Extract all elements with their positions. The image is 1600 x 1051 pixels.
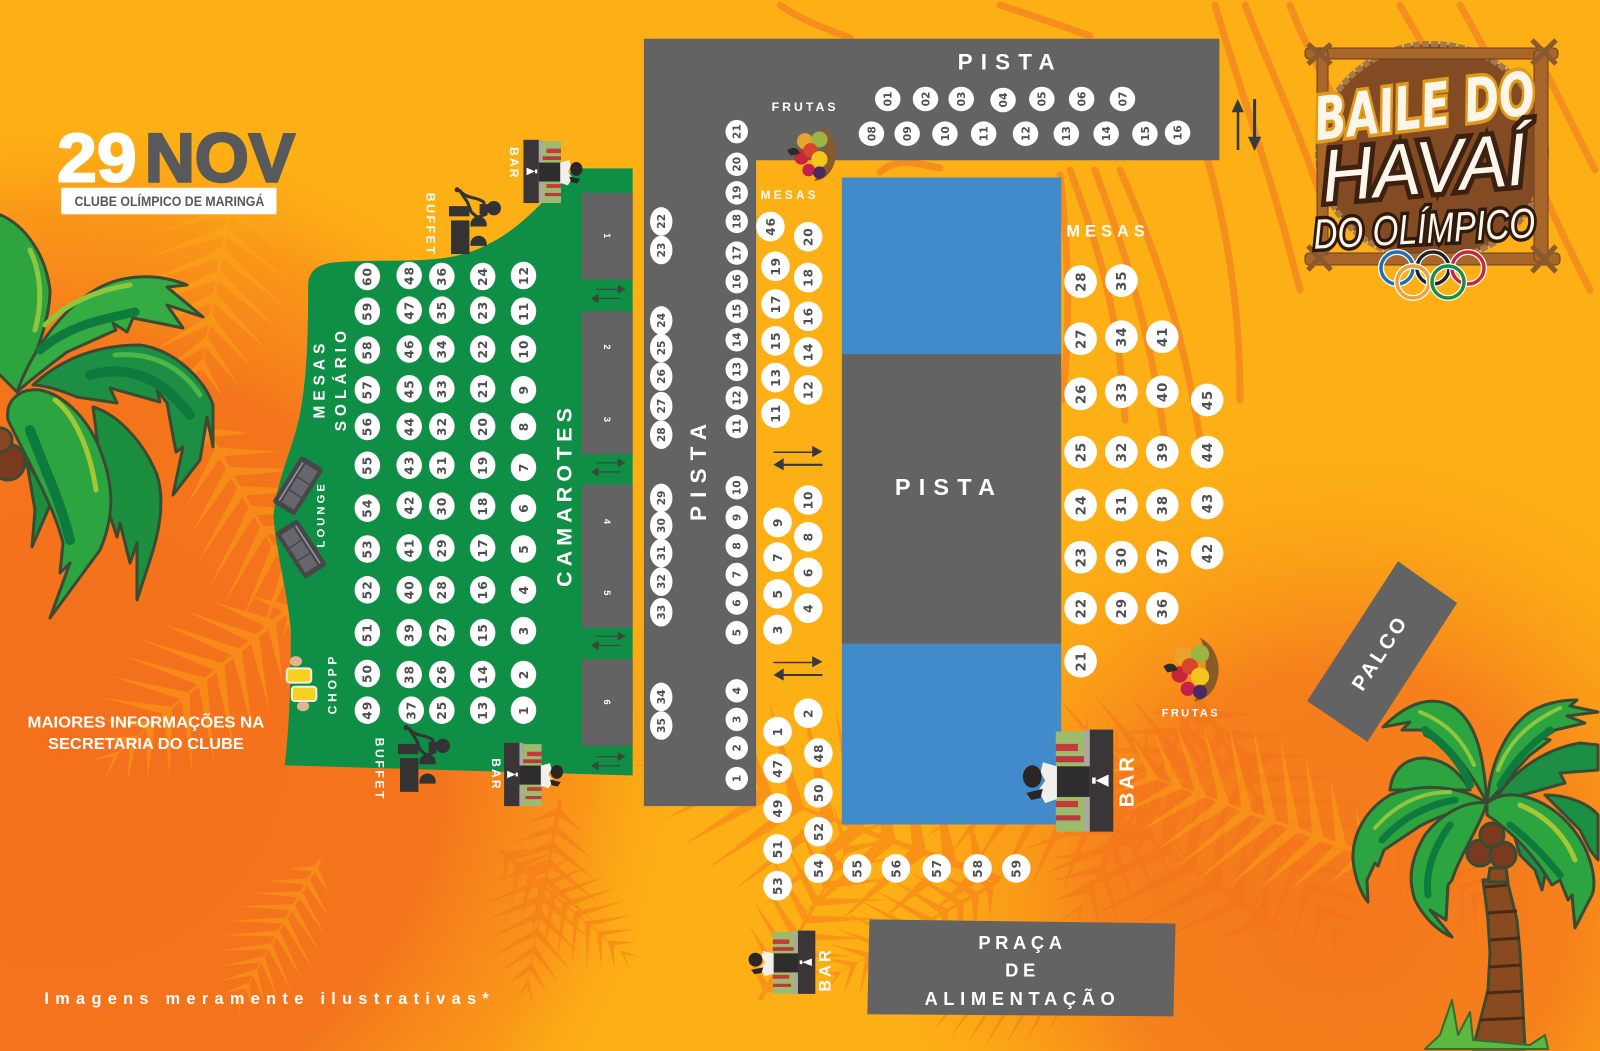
seats: mesas right block: 33 <box>1115 382 1130 402</box>
logo: Baile do Havaí do Olímpico <box>1305 40 1560 298</box>
disclaimer: Imagens meramente ilustrativas* <box>44 990 492 1008</box>
seats: mesas right block: 42 <box>1201 543 1216 563</box>
seats: mesas solário: 58 <box>361 340 375 360</box>
seats: pista vertical outer column: 22 <box>655 214 668 229</box>
seats: mesas left strip: 20 <box>802 227 816 246</box>
info text <box>28 714 264 753</box>
seats: mesas left strip: 11 <box>769 404 783 423</box>
seats: mesas left strip: 58 <box>971 859 985 878</box>
seats: mesas left strip: 55 <box>851 859 865 878</box>
seats: pista vertical inner column: 5 <box>731 629 744 636</box>
seats: mesas solário: 47 <box>403 301 417 320</box>
seats: mesas left strip: 15 <box>769 331 783 350</box>
seats: pista vertical outer column: 28 <box>655 427 668 442</box>
icon: bar right <box>1023 730 1113 832</box>
seats: mesas solário: 39 <box>403 623 417 642</box>
panel: camarotes <box>582 193 633 746</box>
seats: pista vertical inner column: 21 <box>731 124 744 139</box>
panel: praça de alimentação: PRAÇA <box>978 932 1067 953</box>
icon: bar top <box>523 140 582 203</box>
seats: pista vertical outer column: 26 <box>655 369 668 384</box>
seats: mesas left strip: 17 <box>769 295 783 313</box>
date heading: 29 NOV <box>57 121 295 197</box>
arrow: two-way lower lane <box>773 656 822 681</box>
seats: mesas solário: 19 <box>476 456 490 475</box>
seats: mesas solário: 14 <box>476 665 490 684</box>
seats: mesas right block: 41 <box>1156 326 1171 347</box>
venue label <box>61 188 277 214</box>
seats: pista top row: 01 <box>882 92 895 106</box>
seats: pista vertical inner column: 10 <box>731 480 744 495</box>
seats: pista top row: 04 <box>997 93 1010 107</box>
seats: pista top row: 14 <box>1100 126 1113 141</box>
seats: mesas left strip: 6 <box>802 568 816 577</box>
seats: mesas right block: 21 <box>1074 651 1089 671</box>
label: bar bottom: BAR <box>817 947 835 992</box>
seats: pista vertical outer column: 25 <box>655 341 668 355</box>
seats: mesas solário: 1 <box>517 705 531 715</box>
icon: fruit basket top <box>787 125 836 181</box>
panel: palco: PALCO <box>1348 611 1413 695</box>
seats: pista vertical outer column: 34 <box>655 689 668 704</box>
seats: mesas solário: 28 <box>435 580 449 599</box>
seats: mesas left strip: 1 <box>771 727 785 736</box>
seats: pista top row: 15 <box>1139 126 1152 141</box>
seats: mesas left strip: 49 <box>771 799 785 818</box>
seats: mesas right block: 37 <box>1156 547 1171 567</box>
seats: pista vertical inner column: 17 <box>731 246 744 261</box>
camarote numbers: 2 <box>602 344 612 349</box>
seats: mesas solário: 6 <box>517 503 531 513</box>
seats: mesas solário: 49 <box>361 701 375 720</box>
seats: mesas solário: 5 <box>517 544 531 554</box>
seats: mesas right block: 36 <box>1156 598 1171 618</box>
icon: fruit basket right <box>1163 638 1219 701</box>
camarote numbers: 5 <box>602 590 612 595</box>
logo backdrop disc <box>1318 44 1546 260</box>
seats: mesas left strip: 46 <box>764 217 778 236</box>
seats: pista top row: 03 <box>955 92 968 106</box>
seats: mesas solário: 15 <box>476 623 490 642</box>
seats: mesas left strip: 48 <box>812 744 826 762</box>
seats: pista top row: 16 <box>1171 125 1184 140</box>
seats: mesas solário: 36 <box>435 267 449 286</box>
panel: L-shaped pista <box>644 39 1219 806</box>
icon: chopp mugs <box>287 656 316 711</box>
camarote numbers <box>602 233 612 705</box>
seats: mesas right block: 35 <box>1115 270 1130 291</box>
seats: pista vertical outer column: 27 <box>655 399 668 414</box>
label: frutas top: FRUTAS <box>772 100 839 114</box>
icon: left palm tree <box>0 213 213 618</box>
seats: mesas solário: 24 <box>476 267 490 286</box>
seats: mesas right block: 40 <box>1156 382 1171 402</box>
seats: mesas right block: 31 <box>1115 495 1130 515</box>
seats: pista top row: 12 <box>1019 126 1032 141</box>
seats: mesas solário: 45 <box>403 379 417 398</box>
seats: mesas left strip: 2 <box>802 709 816 718</box>
label: bar top: BAR <box>507 147 521 180</box>
panel: praça de alimentação: DE <box>1005 960 1040 981</box>
seats: mesas left strip <box>756 212 1031 901</box>
seats: mesas solário: 23 <box>476 301 490 320</box>
seats: mesas left strip: 59 <box>1010 859 1024 878</box>
date heading: 29 NOV: NOV <box>145 121 295 197</box>
seats: mesas right block: 34 <box>1115 326 1130 347</box>
seats: mesas left strip: 7 <box>771 552 785 562</box>
seats: pista vertical inner column: 16 <box>731 274 744 289</box>
heading: mesas solário <box>311 326 350 431</box>
seats: mesas solário: 17 <box>476 538 490 557</box>
panel: green solário area <box>273 168 633 776</box>
seats: mesas solário: 57 <box>361 380 375 399</box>
seats: pista vertical inner column: 1 <box>731 775 744 782</box>
seats: mesas left strip: 16 <box>802 307 816 326</box>
seats: pista vertical inner column: 8 <box>731 542 744 550</box>
arrow: vertical two-way near top pista <box>1232 99 1261 151</box>
seats: pista vertical outer column: 31 <box>655 546 668 561</box>
logo olympic rings <box>1381 252 1484 298</box>
heading: pista top: PISTA <box>958 49 1063 74</box>
seats: mesas solário: 41 <box>403 538 417 557</box>
seats: pista vertical inner column: 7 <box>731 571 744 578</box>
seats: mesas right block: 27 <box>1074 329 1089 349</box>
logo title: DO OLÍMPICO: DO OLÍMPICO <box>1312 199 1536 258</box>
seats: mesas solário: 48 <box>403 266 417 285</box>
label: buffet bottom: BUFFET <box>373 738 387 801</box>
heading: mesas solário: MESAS <box>311 339 328 419</box>
seats: mesas solário: 8 <box>517 422 531 431</box>
date heading: 29 NOV: 29 <box>57 121 137 197</box>
seats: mesas solário <box>355 262 536 724</box>
seats: mesas right block: 30 <box>1115 547 1130 567</box>
seats: mesas solário: 33 <box>435 379 449 398</box>
seats: pista vertical inner column: 6 <box>731 599 744 607</box>
seats: pista vertical inner column: 4 <box>731 687 744 695</box>
label: buffet top: BUFFET <box>424 193 438 256</box>
seats: mesas solário: 55 <box>361 456 375 475</box>
heading: camarotes: CAMAROTES <box>552 403 576 587</box>
seats: mesas right block: 32 <box>1115 442 1130 462</box>
label: mesas right: MESAS <box>1066 223 1150 241</box>
camarote numbers: 4 <box>602 519 612 525</box>
info text: SECRETARIA DO CLUBE <box>48 736 244 753</box>
label: bar green bottom: BAR <box>489 758 503 791</box>
seats: pista vertical inner column: 12 <box>731 391 744 405</box>
seats: mesas solário: 18 <box>476 497 490 516</box>
logo bamboo frame <box>1305 40 1560 272</box>
seats: mesas solário: 50 <box>361 664 375 683</box>
seats: mesas solário: 52 <box>361 580 375 599</box>
seats: mesas solário: 21 <box>476 379 490 398</box>
icon: bar bottom <box>749 931 815 994</box>
seats: mesas solário: 54 <box>361 499 375 518</box>
label: chopp: CHOPP <box>326 653 340 714</box>
seats: mesas right block: 24 <box>1074 495 1089 515</box>
seats: pista vertical inner column: 18 <box>731 214 744 229</box>
seats: pista vertical inner column: 20 <box>731 157 744 172</box>
icon: buffet top <box>449 187 501 254</box>
seats: mesas solário: 31 <box>435 456 449 475</box>
icon: lounge sofas <box>272 455 327 579</box>
seats: mesas solário: 38 <box>403 665 417 684</box>
seats: pista vertical outer column: 32 <box>655 574 668 589</box>
seats: mesas solário: 22 <box>476 339 490 359</box>
panel: palco <box>1307 561 1457 742</box>
seats: mesas left strip: 53 <box>771 876 785 895</box>
seats: mesas left strip: 18 <box>802 268 816 287</box>
seats: mesas solário: 37 <box>405 701 419 720</box>
seats: mesas solário: 34 <box>435 339 449 359</box>
seats: mesas left strip: 10 <box>802 491 816 509</box>
camarote numbers: 6 <box>602 699 612 705</box>
panel: praça de alimentação <box>867 919 1176 1016</box>
seats: mesas solário: 11 <box>517 302 531 321</box>
seats: mesas solário: 26 <box>435 665 449 684</box>
seats: mesas right block <box>1064 264 1223 678</box>
icon: right palm tree <box>1353 700 1598 1049</box>
seats: mesas left strip: 13 <box>769 368 783 387</box>
seats: mesas left strip: 5 <box>771 589 785 599</box>
seats: mesas left strip: 19 <box>769 257 783 276</box>
seats: pista top row: 05 <box>1036 92 1049 106</box>
seats: mesas left strip: 52 <box>812 822 826 841</box>
label: lounge: LOUNGE <box>315 481 327 547</box>
seats: mesas left strip: 47 <box>771 759 785 778</box>
seats: mesas right block: 44 <box>1201 442 1216 462</box>
seats: pista top row: 13 <box>1060 126 1073 141</box>
seats: mesas left strip: 14 <box>802 343 816 361</box>
seats: mesas left strip: 57 <box>930 859 944 878</box>
seats: mesas solário: 44 <box>403 417 417 436</box>
seats: pista vertical inner column: 14 <box>731 332 744 347</box>
label: mesas left: MESAS <box>761 189 819 202</box>
venue label: CLUBE OLÍMPICO DE MARINGÁ <box>74 193 264 209</box>
panel: praça de alimentação: ALIMENTAÇÃO <box>924 988 1120 1009</box>
seats: pista top row: 10 <box>939 126 952 141</box>
seats: mesas solário: 30 <box>435 497 449 516</box>
seats: mesas right block: 29 <box>1115 598 1130 618</box>
seats: mesas left strip: 12 <box>802 380 816 399</box>
arrows: camarote passages <box>592 286 624 769</box>
seats: mesas left strip: 56 <box>889 859 903 878</box>
seats: mesas left strip: 4 <box>802 603 816 613</box>
label: bar right: BAR <box>1117 754 1139 807</box>
arrow: two-way upper lane <box>773 446 822 470</box>
seats: mesas right block: 22 <box>1074 598 1089 618</box>
seats: pista top row <box>859 87 1190 146</box>
camarote numbers: 1 <box>602 233 612 238</box>
seats: mesas right block: 26 <box>1074 384 1089 404</box>
seats: mesas solário: 25 <box>435 701 449 720</box>
seats: mesas right block: 45 <box>1201 390 1216 410</box>
icon: buffet bottom <box>398 725 450 792</box>
seats: pista top row: 08 <box>865 126 878 141</box>
camarote numbers: 3 <box>602 417 612 422</box>
seats: mesas left strip: 9 <box>771 518 785 527</box>
seats: pista vertical inner column: 13 <box>731 362 744 377</box>
seats: pista vertical outer column: 29 <box>655 491 668 505</box>
seats: mesas solário: 56 <box>361 417 375 436</box>
seats: mesas solário: 59 <box>361 302 375 321</box>
seats: mesas solário: 12 <box>517 266 531 285</box>
seats: mesas solário: 60 <box>361 267 375 286</box>
seats: pista top row: 07 <box>1116 92 1129 106</box>
seats: pista vertical outer column: 24 <box>655 313 668 328</box>
seats: pista top row: 09 <box>901 126 914 141</box>
seats: pista vertical outer column: 33 <box>655 605 668 620</box>
info text: MAIORES INFORMAÇÕES NA <box>28 714 264 732</box>
seats: mesas right block: 39 <box>1156 442 1171 462</box>
seats: mesas solário: 53 <box>361 539 375 559</box>
seats: mesas solário: 16 <box>476 580 490 599</box>
seats: mesas solário: 43 <box>403 456 417 475</box>
seats: mesas solário: 51 <box>361 623 375 642</box>
heading: pista central: PISTA <box>895 474 1003 500</box>
seats: mesas solário: 13 <box>476 701 490 720</box>
seats: pista vertical inner column <box>726 120 748 790</box>
seats: pista vertical outer column: 35 <box>655 718 668 733</box>
seats: mesas right block: 43 <box>1201 493 1216 513</box>
seats: mesas solário: 10 <box>517 339 531 359</box>
logo title: HAVAÍ: HAVAÍ <box>1318 116 1539 218</box>
label: frutas right: FRUTAS <box>1162 707 1220 719</box>
seats: mesas solário: 20 <box>476 417 490 436</box>
panel: blue area top <box>842 178 1061 354</box>
seats: mesas solário: 3 <box>517 626 531 635</box>
seats: mesas solário: 7 <box>517 463 531 472</box>
seats: pista vertical inner column: 19 <box>731 185 744 200</box>
seats: mesas right block: 28 <box>1074 271 1089 292</box>
seats: mesas left strip: 8 <box>802 532 816 541</box>
seats: mesas left strip: 54 <box>812 859 826 878</box>
heading: pista vertical: PISTA <box>686 416 711 521</box>
seats: mesas right block: 38 <box>1156 495 1171 515</box>
seats: mesas solário: 29 <box>435 538 449 557</box>
icon: bar green bottom <box>504 743 563 806</box>
seats: pista top row: 02 <box>919 92 932 106</box>
seats: mesas right block: 25 <box>1074 442 1089 462</box>
seats: mesas solário: 40 <box>403 580 417 599</box>
seats: pista vertical outer column: 30 <box>655 518 668 533</box>
seats: pista vertical inner column: 15 <box>731 304 744 319</box>
seats: pista vertical inner column: 9 <box>731 514 744 521</box>
seats: pista vertical inner column: 3 <box>731 716 744 723</box>
seats: mesas left strip: 50 <box>812 784 826 802</box>
seats: mesas solário: 2 <box>517 670 531 679</box>
seats: pista vertical outer column <box>650 207 672 740</box>
seats: pista top row: 11 <box>978 126 991 141</box>
seats: mesas left strip: 51 <box>771 840 785 858</box>
panel: central pista <box>842 354 1061 644</box>
seats: pista vertical inner column: 11 <box>731 419 744 434</box>
panel: blue area bottom <box>842 644 1061 824</box>
seats: mesas solário: 4 <box>517 585 531 595</box>
seats: pista top row: 06 <box>1076 92 1089 106</box>
seats: mesas solário: 32 <box>435 417 449 436</box>
heading: mesas solário: SOLÁRIO <box>333 326 350 431</box>
seats: pista vertical outer column: 23 <box>655 243 668 257</box>
seats: mesas left strip: 3 <box>771 625 785 634</box>
seats: mesas solário: 27 <box>435 623 449 642</box>
seats: mesas right block: 23 <box>1074 547 1089 567</box>
seats: mesas solário: 46 <box>403 339 417 359</box>
seats: mesas solário: 35 <box>435 301 449 320</box>
seats: mesas solário: 42 <box>403 496 417 515</box>
seats: mesas solário: 9 <box>517 385 531 395</box>
seats: pista vertical inner column: 2 <box>731 744 744 752</box>
